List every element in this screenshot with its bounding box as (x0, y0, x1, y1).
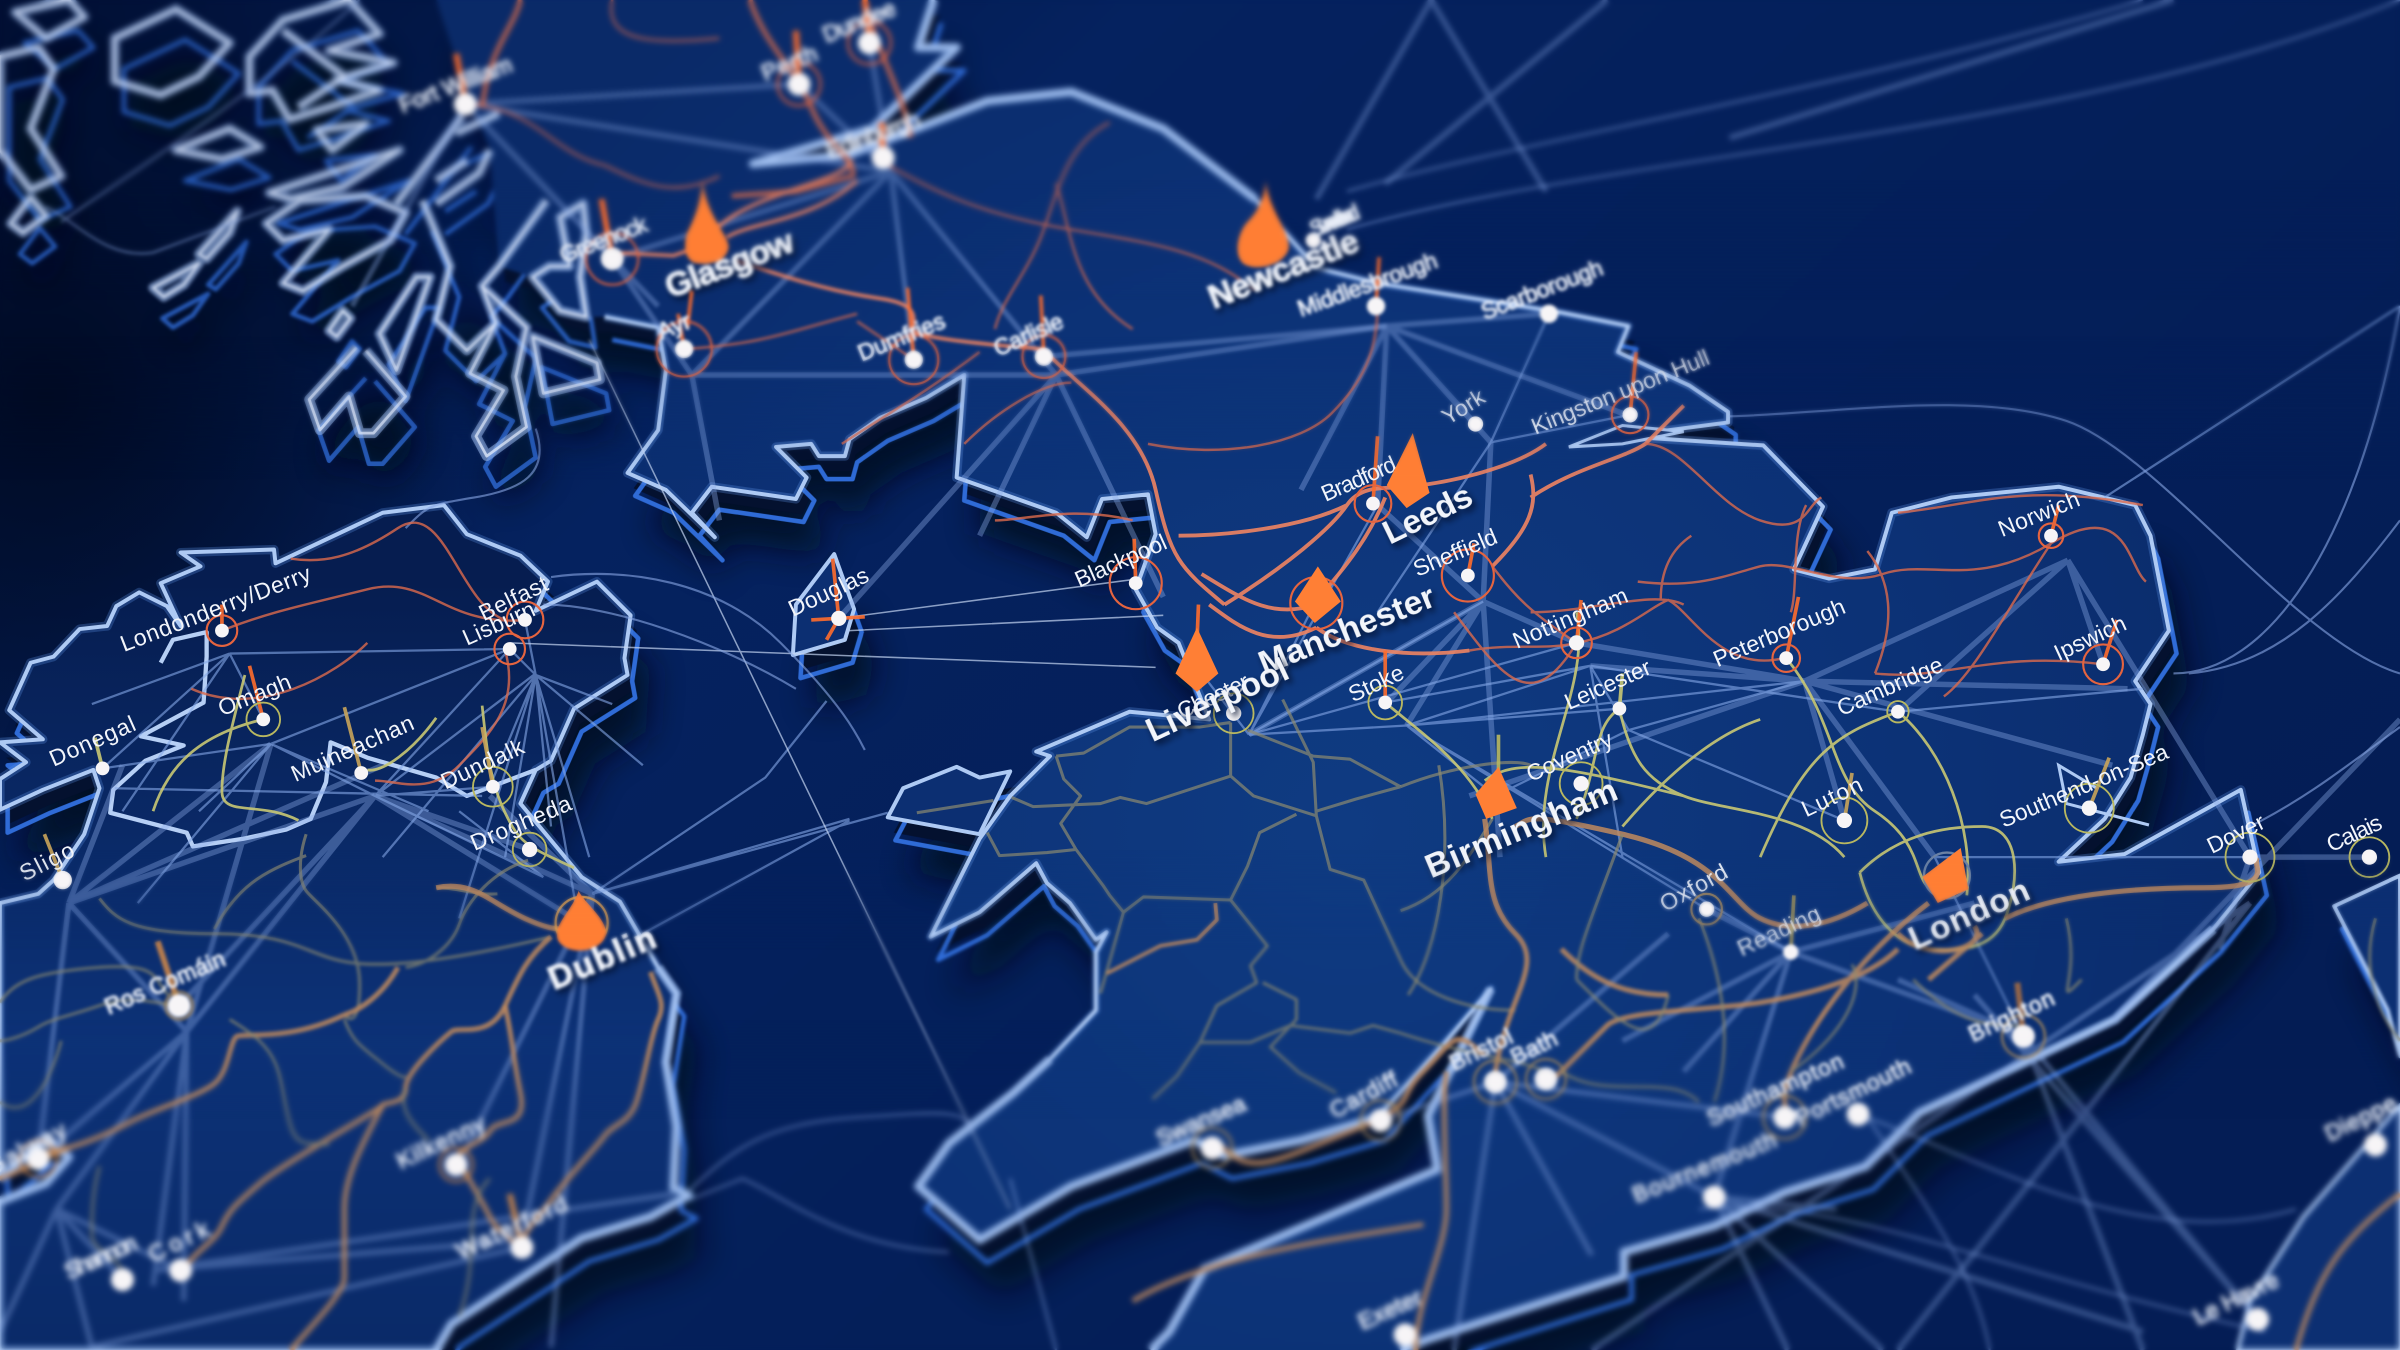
city: Dover: Dover (2203, 808, 2269, 859)
city: Cork: Cork (144, 1215, 214, 1267)
city: Shannon: Shannon (60, 1229, 141, 1284)
city: Nottingham: Nottingham (1509, 582, 1632, 654)
city: Stoke: Stoke (1344, 659, 1408, 707)
pin and label: Dublin: Dublin (543, 919, 661, 998)
city: Middlesbrough: Middlesbrough (1294, 247, 1441, 322)
pin and label: Glasgow: Glasgow (660, 223, 800, 306)
city: Londonderry/Derry: Londonderry/Derry (116, 560, 315, 657)
pin and label: Manchester: Manchester (1253, 578, 1440, 682)
city: Perth: Perth (757, 40, 821, 86)
city: Waterford: Waterford (452, 1190, 571, 1264)
city: Dieppe: Dieppe (2320, 1089, 2400, 1146)
city: Calais: Calais (2322, 809, 2386, 857)
city: Luton (1797, 771, 1867, 843)
pin and label: Leeds (1377, 433, 1479, 552)
city: Dover (2203, 808, 2274, 882)
city: Cardiff: Cardiff (1325, 1066, 1402, 1123)
city: Sligo: Sligo (15, 837, 79, 886)
city: Ayr: Ayr (653, 308, 695, 344)
city: Bournemouth: Bournemouth (1628, 1126, 1780, 1208)
city: Blackpool: Blackpool (1071, 529, 1171, 592)
city: York: York (1437, 383, 1490, 430)
Anglesey (888, 767, 1010, 834)
city: Reading: Reading (1733, 900, 1824, 961)
city: Peterborough: Peterborough (1709, 593, 1849, 672)
city: Carlisle (989, 295, 1067, 378)
city: Calais (2322, 809, 2389, 877)
city: Scarborough: Scarborough (1477, 254, 1607, 325)
city: Dumfries: Dumfries (854, 307, 949, 366)
Scottish islands and sea lochs (0, 0, 600, 456)
city: Greenock: Greenock (556, 211, 651, 268)
city: Drogheda: Drogheda (466, 790, 575, 856)
city: Sheffield: Sheffield (1409, 523, 1501, 582)
road network: Midlands and south (1133, 612, 2400, 1350)
Northern Ireland border (110, 632, 536, 846)
city: Edinburgh: Edinburgh (822, 106, 923, 164)
city: Coventry: Coventry (1522, 725, 1617, 787)
city: Donegal: Donegal (45, 710, 140, 771)
pin and label: Birmingham: Birmingham (1420, 772, 1623, 886)
city: Southampton: Southampton (1703, 1048, 1847, 1131)
city: Ros Comáin: Ros Comáin (100, 945, 229, 1019)
city: Dundalk: Dundalk (437, 733, 528, 794)
city: Southend-on-Sea: Southend-on-Sea (1995, 738, 2172, 833)
landmass: Great Britain (436, 0, 2259, 1350)
road network: Wales and west Midlands (917, 699, 1546, 1099)
city: Douglas: Douglas (784, 562, 873, 621)
city: Norwich: Norwich (1994, 486, 2083, 542)
city: Exeter: Exeter (1354, 1283, 1426, 1335)
city: Dumfries (854, 288, 949, 384)
thickened out-of-focus coast (753, 0, 2213, 1350)
city: Muineachan: Muineachan (287, 709, 418, 787)
pin and label: Liverpool with Chester: Chester (1173, 668, 1253, 724)
city: Swansea: Swansea (1152, 1090, 1250, 1151)
city: Portsmouth: Portsmouth (1791, 1053, 1915, 1131)
city: Bath (1506, 1025, 1566, 1099)
city: Cambridge: Cambridge (1833, 651, 1947, 721)
France coast (2238, 876, 2400, 1350)
pin and label: Liverpool with Chester: Liverpool (1140, 651, 1295, 750)
city: Belfast: Belfast (474, 570, 552, 626)
city: Perth (757, 31, 821, 106)
pin and label: Newcastle: Newcastle (1203, 223, 1364, 317)
city: Ipswich: Ipswich (2050, 610, 2130, 666)
city: Bradford: Bradford (1317, 450, 1400, 507)
pin and label: London: London (1903, 872, 2036, 958)
city: Leicester: Leicester (1560, 654, 1655, 715)
city: Le Havre: Le Havre (2189, 1266, 2283, 1330)
city: Kilkenny: Kilkenny (392, 1110, 490, 1174)
city: Luton: Luton (1797, 771, 1866, 822)
pin and label: Glasgow (660, 181, 800, 306)
city: Bristol: Bristol (1445, 1023, 1517, 1076)
city: Kingston upon Hull: Kingston upon Hull (1527, 344, 1713, 439)
city: Brighton: Brighton (1964, 985, 2058, 1047)
road network: Scotland and northern England (465, 0, 2146, 696)
city: Bath: Bath (1506, 1025, 1562, 1070)
city: Greenock (556, 199, 651, 285)
pin and label: Leeds: Leeds (1377, 477, 1479, 552)
city: Oxford: Oxford (1655, 858, 1732, 917)
city: Lisburn: Lisburn (458, 596, 539, 650)
city: Bradford (1317, 436, 1400, 522)
landmass: Ireland (0, 505, 689, 1350)
city: Fort William: Fort William (395, 51, 516, 118)
road network: Ireland (0, 523, 661, 1350)
city: Ayr (653, 291, 712, 377)
pin and label: Newcastle (1203, 181, 1364, 317)
city: Omagh: Omagh (214, 668, 295, 721)
pin and label: Liverpool with Chester (1140, 605, 1295, 750)
city: Stoke (1344, 651, 1408, 719)
pin and label: Newcastle: Sunderland (1305, 198, 1363, 242)
city: Bristol (1445, 1023, 1517, 1104)
Isle of Man (793, 554, 854, 655)
city: Carlisle: Carlisle (989, 308, 1067, 361)
